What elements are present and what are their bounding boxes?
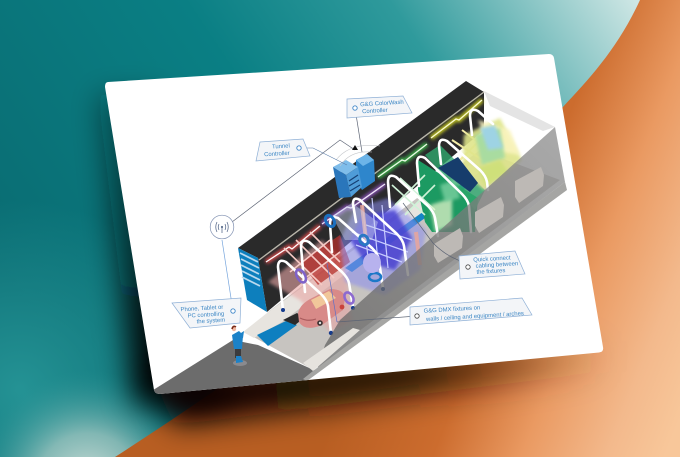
callout: G&G DMX fixtures: walls / ceiling and equipment / arches xyxy=(425,311,524,323)
callout: G&G ColorWash Controller xyxy=(347,96,412,118)
callout: Phone, Tablet or PC: the system xyxy=(197,318,225,325)
floor: dark trench xyxy=(283,313,299,325)
windows in right wall xyxy=(434,167,544,263)
car xyxy=(298,289,345,328)
wall: silver rail xyxy=(259,92,484,260)
card shadow: left side xyxy=(98,95,230,405)
icon: wifi signal circle xyxy=(210,215,234,239)
fixtures: purple and blue brushes xyxy=(294,214,381,305)
signal arcs around controller xyxy=(336,145,380,166)
arch foot caps xyxy=(281,287,385,335)
wall: translucent right wall xyxy=(317,127,565,370)
dark equipment in green zone xyxy=(438,157,478,192)
wall: black tunnel wall xyxy=(238,81,484,312)
arches: white equipment gantries xyxy=(278,110,493,333)
callout: Phone, Tablet or PC xyxy=(172,298,241,328)
callout: G&G ColorWash Controller: G&G ColorWash xyxy=(360,100,404,108)
callout: Phone, Tablet or PC: PC controlling xyxy=(187,311,224,320)
floor: pale walkway along the wall xyxy=(244,201,423,338)
callout: G&G ColorWash Controller: Controller xyxy=(362,108,388,115)
light zone: red xyxy=(266,226,352,332)
person using a phone xyxy=(232,326,247,366)
light zone: blue xyxy=(332,198,426,295)
wall: bottom lip xyxy=(303,182,567,381)
callout: G&G DMX fixtures xyxy=(410,298,532,325)
light zone: yellow xyxy=(431,100,522,190)
fixture: blue drum xyxy=(363,253,381,273)
light zone: purple strip xyxy=(322,184,385,224)
wall: upper translucent ceiling frame xyxy=(484,91,555,131)
callout: G&G DMX fixtures: G&G DMX fixtures on xyxy=(423,305,480,315)
floor: front light lip xyxy=(303,328,360,371)
callout connector lines xyxy=(222,108,468,322)
callout: Tunnel Controller: Controller xyxy=(264,151,290,158)
callout: Quick connect cabling: the fixtures xyxy=(476,268,506,276)
ground: dark grey entry floor xyxy=(154,340,314,394)
tunnel illustration xyxy=(150,81,567,400)
light zone: green xyxy=(378,144,485,232)
floor: tunnel floor xyxy=(250,150,560,368)
panel: white card xyxy=(100,50,610,400)
card shadow: bottom side xyxy=(150,340,605,425)
callout: Quick connect cabling xyxy=(459,251,525,279)
callout: Quick connect cabling: cabling between xyxy=(476,261,518,270)
callout: Tunnel Controller xyxy=(256,139,310,161)
callout: Phone, Tablet or PC: Phone, Tablet or xyxy=(180,305,224,313)
callout: Quick connect cabling: Quick connect xyxy=(473,255,511,264)
controller: blue cabinets xyxy=(333,154,375,198)
wall: blue end panel xyxy=(238,248,267,312)
floor: blue entry strip xyxy=(257,320,297,346)
floor: blue conveyor xyxy=(345,185,465,272)
callout: Tunnel Controller: Tunnel xyxy=(272,143,290,151)
